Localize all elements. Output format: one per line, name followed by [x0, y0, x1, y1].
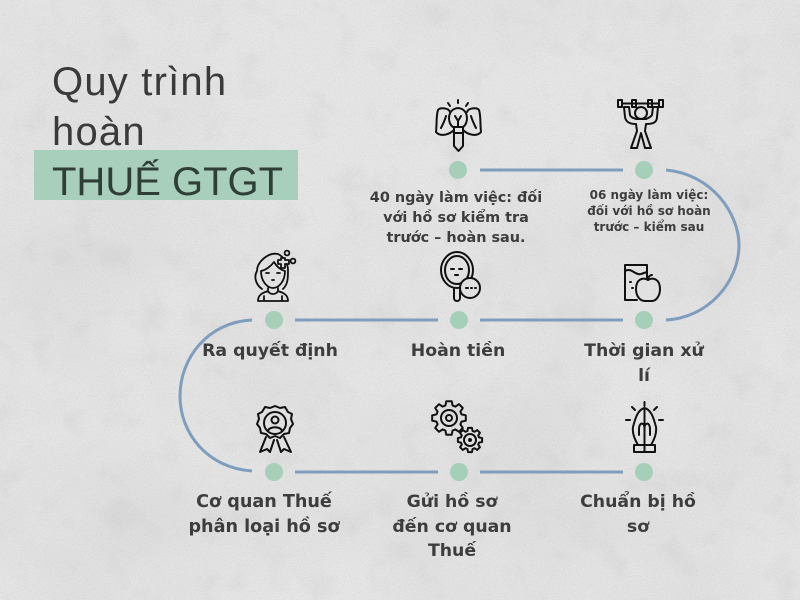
icon: rosette badge [257, 406, 293, 452]
step text: 06 ngày: đối với hồ sơ hoàn [587, 204, 711, 218]
title highlight bar [34, 150, 298, 200]
step text: 06 ngày [587, 188, 711, 234]
step text: 40 ngày: 40 ngày làm việc: đối [370, 190, 542, 206]
icon: gears [432, 401, 482, 452]
path connector: right upper curve [666, 170, 739, 320]
icon: praying hands [626, 402, 663, 452]
step text: Chuẩn bị hồ sơ: sơ [627, 516, 649, 536]
step text: 40 ngày [370, 189, 542, 246]
title: Quy trình [52, 60, 227, 104]
icon: woman with sparkles [255, 251, 295, 301]
path connector: left curve [180, 320, 252, 471]
icon: glass of juice and apple [625, 265, 660, 301]
step text: 06 ngày: trước – kiểm sau [594, 220, 704, 234]
step text: 06 ngày: 06 ngày làm việc: [590, 188, 708, 202]
icon: hand mirror [441, 252, 480, 301]
step text: Hoàn tiền: Hoàn tiền [411, 341, 505, 361]
step text: Cơ quan Thuế: Cơ quan Thuế [196, 492, 332, 512]
step text: Thời gian xử lí [584, 341, 704, 386]
step text: Gửi hồ sơ: đến cơ quan [392, 516, 512, 536]
timeline dots [265, 161, 653, 481]
path connector: row 2 lines [295, 318, 623, 322]
step text: Cơ quan Thuế: phân loại hồ sơ [188, 516, 340, 536]
title: hoàn [52, 110, 146, 154]
icon: muscled light bulb pencil [436, 100, 481, 151]
step text: Ra quyết định: Ra quyết định [202, 341, 338, 361]
title: THUẾ GTGT [52, 160, 283, 204]
path connector: row 1 line [480, 168, 623, 172]
step text: Gửi hồ sơ [392, 492, 512, 561]
step text: 40 ngày: với hồ sơ kiểm tra [383, 210, 529, 226]
title [52, 60, 283, 204]
step text: Chuẩn bị hồ sơ: Chuẩn bị hồ [580, 492, 696, 512]
step text: Chuẩn bị hồ sơ [580, 491, 696, 536]
step text: Gửi hồ sơ: Gửi hồ sơ [407, 492, 497, 512]
icon: weightlifter [618, 100, 663, 148]
step text: Gửi hồ sơ: Thuế [428, 541, 476, 561]
step text: Cơ quan Thuế [188, 492, 340, 536]
path connector: row 3 lines [295, 470, 623, 474]
step text: 40 ngày: trước – hoàn sau. [387, 230, 525, 246]
step text: Thời gian xử lí: lí [638, 366, 650, 386]
step text: Thời gian xử lí: Thời gian xử [584, 341, 704, 361]
